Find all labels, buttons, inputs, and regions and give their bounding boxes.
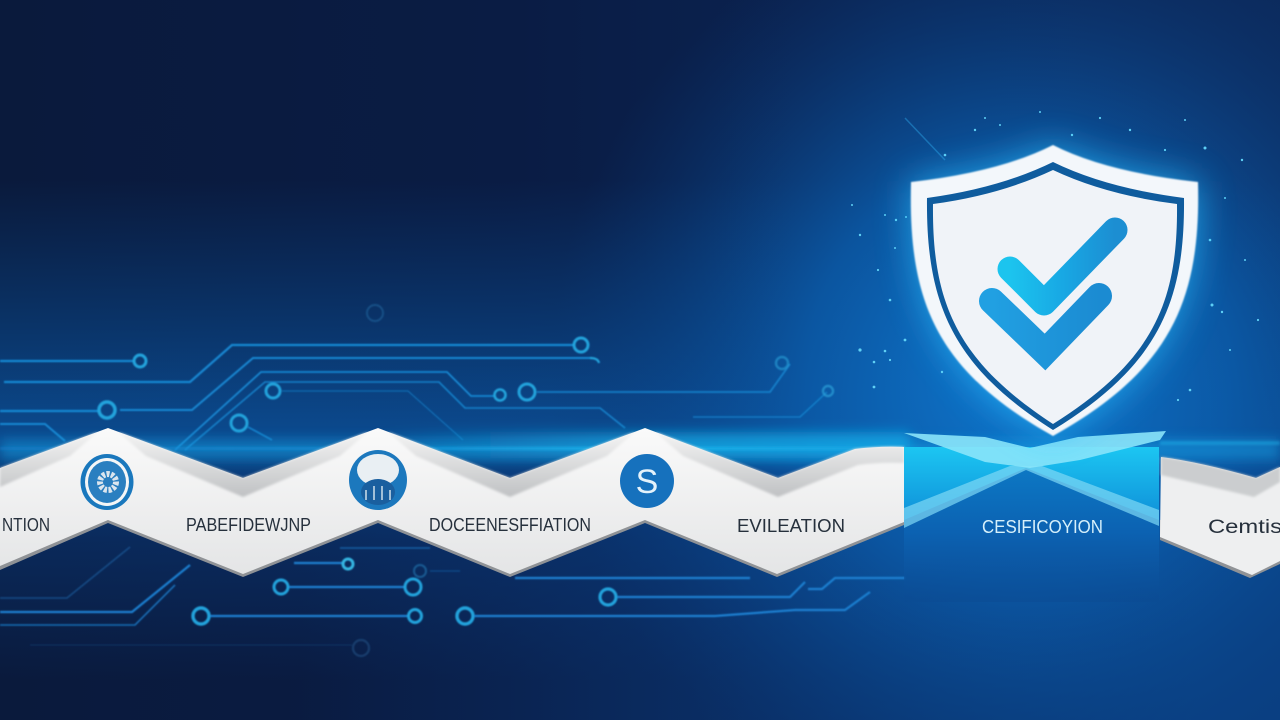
- panel label: CESIFICOYION: [982, 517, 1103, 537]
- icon: gear seal: [80, 454, 134, 510]
- check upper: [1010, 230, 1115, 303]
- panel glass plate: [904, 431, 1166, 468]
- process ribbon: [0, 428, 904, 577]
- shield inner line: [927, 162, 1184, 430]
- glow particles: [851, 111, 1259, 401]
- panel cyan wings: [904, 447, 1159, 520]
- circuit lines upper: [0, 305, 833, 450]
- shield inner face: [933, 170, 1177, 424]
- circuit lines lower: [0, 547, 905, 656]
- shield glow: [911, 145, 1198, 436]
- label: step two: PABEFIDEWJNP: [186, 515, 311, 535]
- icon: shield with double check: [911, 145, 1198, 436]
- panel light bands: [904, 466, 1159, 528]
- shield outer rim: [911, 145, 1198, 436]
- label: partial left: NTION: [2, 515, 50, 535]
- certification panel: [904, 431, 1166, 602]
- panel body: [904, 447, 1159, 602]
- right ribbon segment: [1160, 457, 1280, 578]
- icon: s seal: S: [636, 463, 658, 501]
- ribbon front face: [0, 428, 904, 574]
- check lower: [992, 296, 1099, 352]
- icon: s seal: [620, 454, 674, 508]
- label: step three: DOCEENESFFIATION: [429, 515, 591, 535]
- icon: crest seal: [349, 450, 407, 510]
- label: partial right: Cemtis: [1208, 517, 1280, 538]
- horizontal light beam: [0, 432, 1280, 460]
- ribbon fold shading: [0, 432, 904, 497]
- label: step four: EVILEATION: [737, 516, 845, 536]
- ribbon shadow edge: [0, 515, 904, 577]
